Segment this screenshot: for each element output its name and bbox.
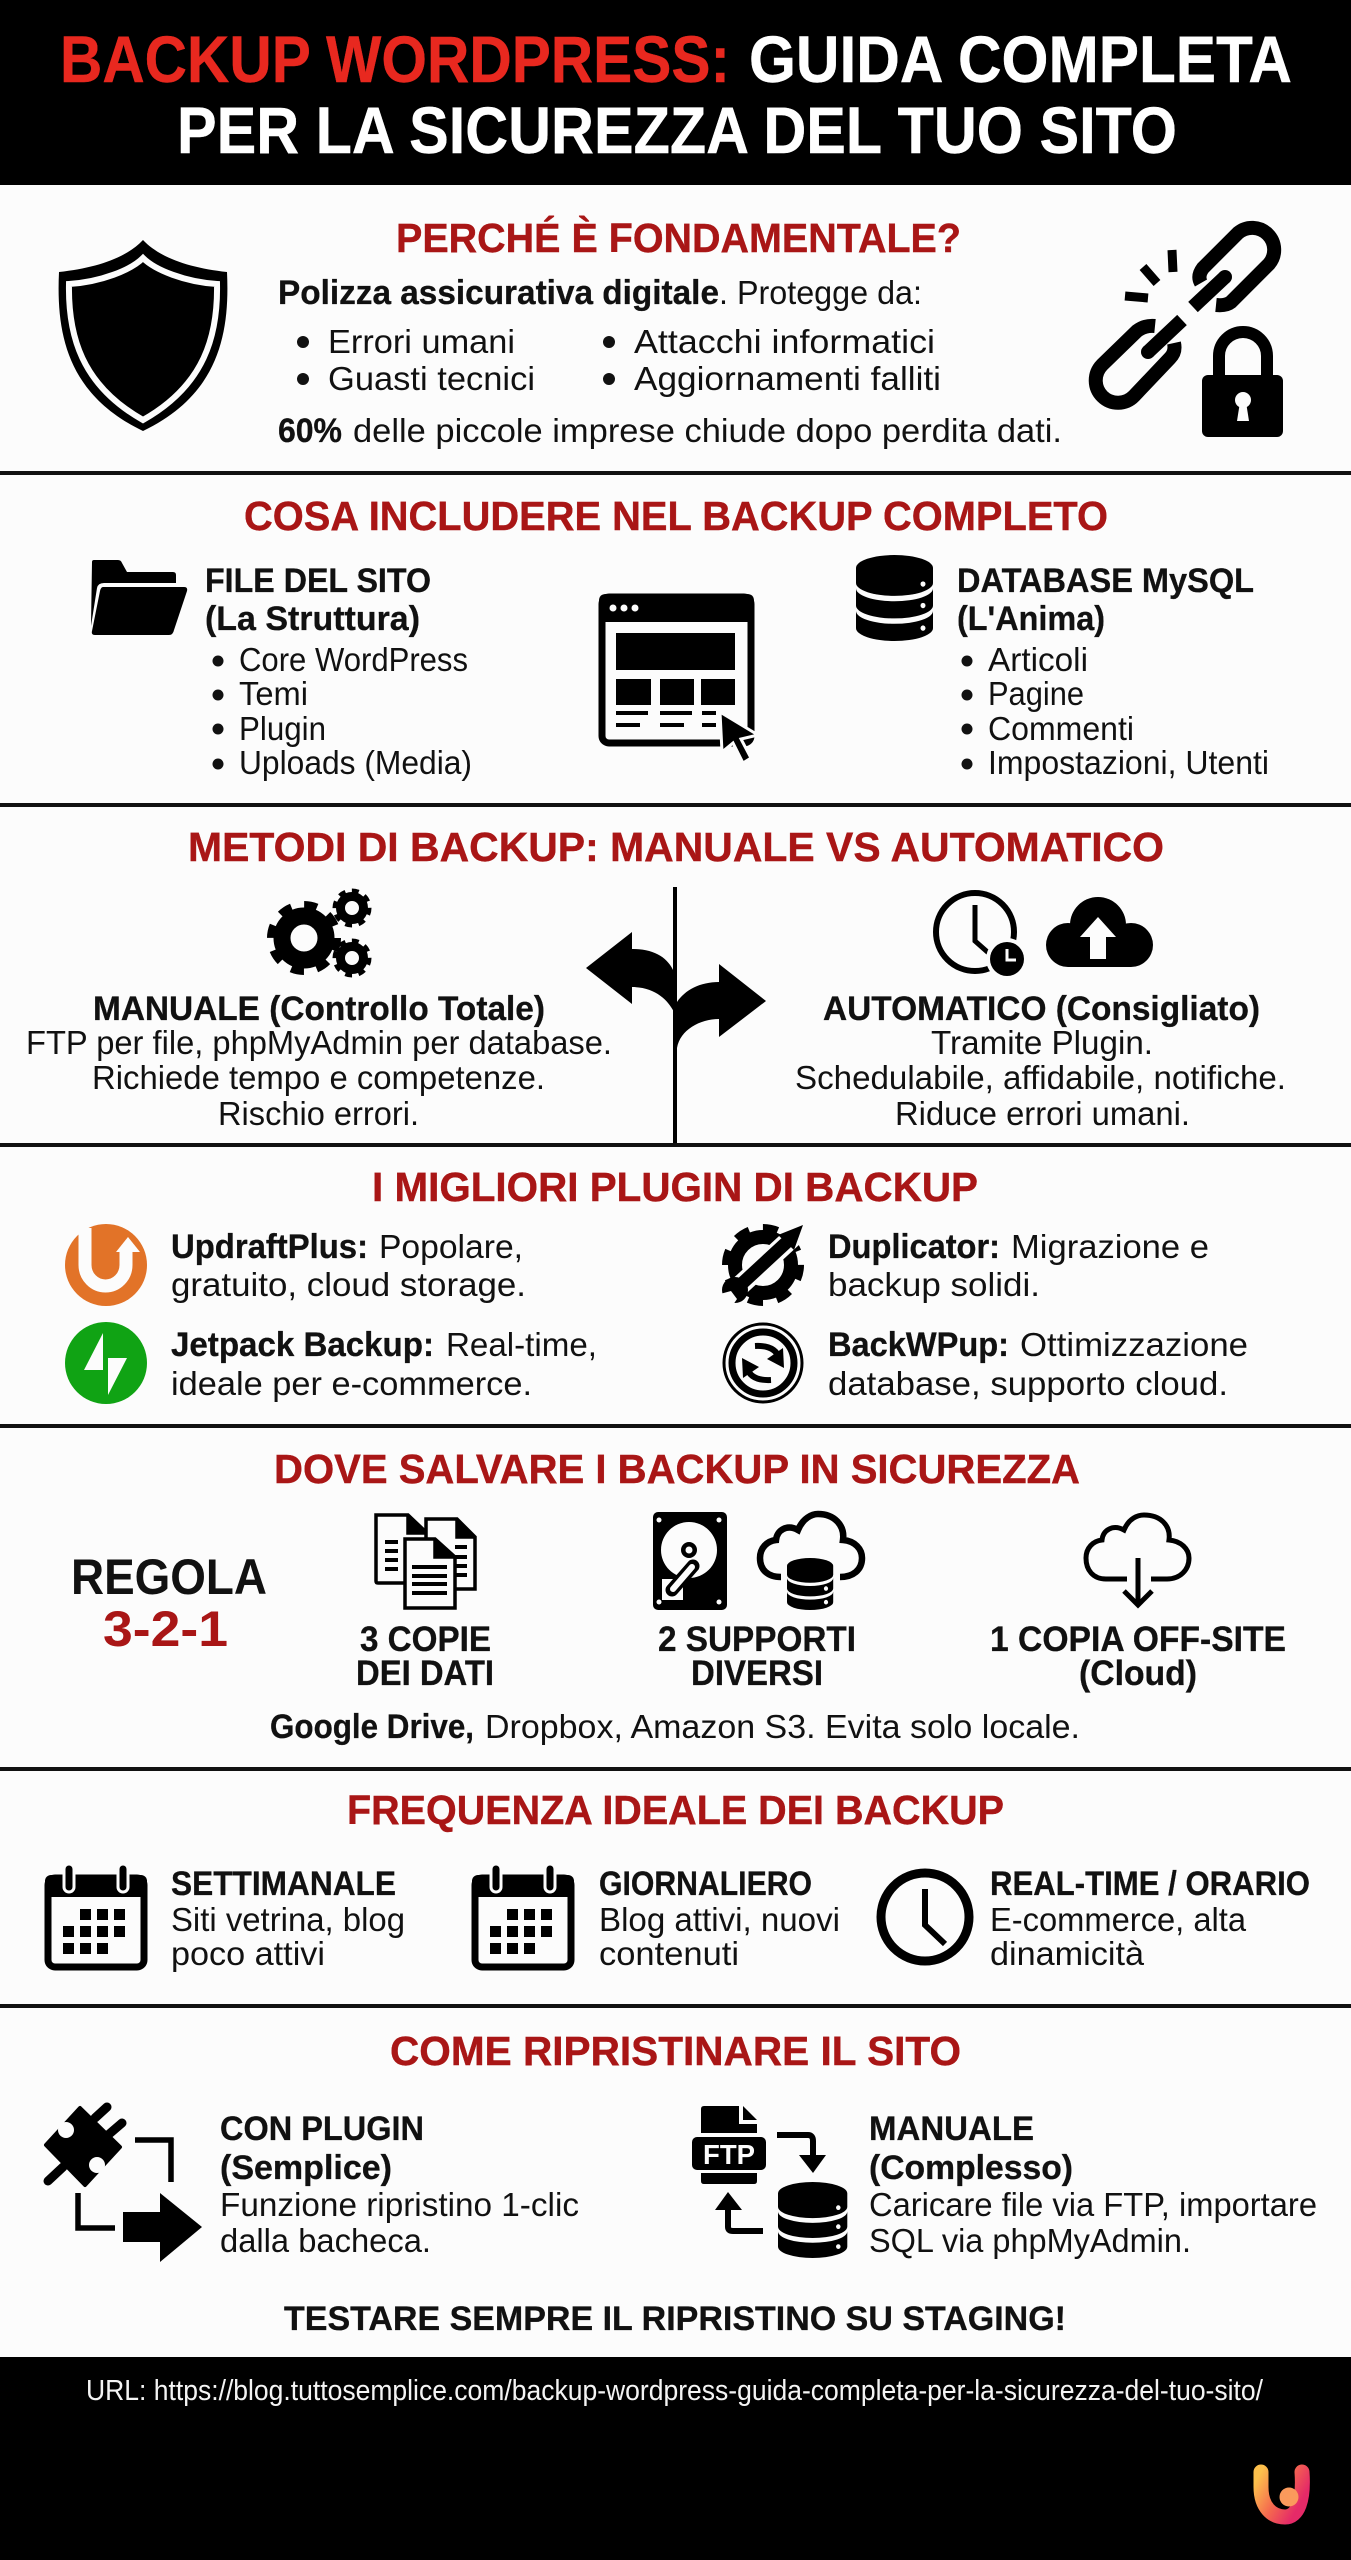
text: con plugin: Funzione ripristino 1-clic xyxy=(220,2186,579,2223)
text: giornaliero: GIORNALIERO xyxy=(599,1865,812,1903)
icon: shield xyxy=(59,240,227,431)
text: manuale ripristino: MANUALE xyxy=(869,2110,1034,2148)
text: file del sito: (La Struttura) xyxy=(205,600,420,638)
text: giornaliero: Blog attivi, nuovi xyxy=(599,1901,840,1938)
heading: FREQUENZA IDEALE DEI BACKUP xyxy=(347,1787,1004,1833)
text: destinazioni: Dropbox, Amazon S3. Evita solo locale. xyxy=(485,1708,1080,1745)
text: automatico xyxy=(795,990,1286,1132)
text: database mysql: Articoli xyxy=(988,641,1088,678)
text: destinazioni: Google Drive, xyxy=(270,1708,474,1746)
icon: folder xyxy=(91,560,187,635)
text: automatico: Riduce errori umani. xyxy=(895,1095,1190,1132)
label: 3 copie: DEI DATI xyxy=(356,1654,494,1693)
text: database mysql: Pagine xyxy=(988,675,1084,712)
callout: testare su staging: TESTARE SEMPRE IL RIPRISTINO SU STAGING! xyxy=(284,2300,1066,2338)
text: manuale: FTP per file, phpMyAdmin per database. xyxy=(26,1024,612,1061)
text: duplicator: backup solidi. xyxy=(828,1266,1040,1303)
text: real-time: dinamicità xyxy=(990,1935,1145,1972)
text: file del sito: Core WordPress xyxy=(239,641,468,678)
label: 3 copie: 3 COPIE xyxy=(360,1620,491,1659)
label: 3 copie xyxy=(356,1620,494,1693)
text: giornaliero xyxy=(599,1865,840,1972)
text: file del sito: Plugin xyxy=(239,710,326,747)
list: rischi: Attacchi informatici xyxy=(634,323,935,360)
panel: perché è fondamentale xyxy=(59,215,1283,450)
text: duplicator: Migrazione e xyxy=(1011,1228,1209,1265)
text: automatico: Schedulabile, affidabile, notifiche. xyxy=(795,1059,1286,1096)
text: backwpup: Ottimizzazione xyxy=(1020,1326,1248,1363)
icon: calendar daily xyxy=(472,1864,574,1967)
heading: COME RIPRISTINARE IL SITO xyxy=(390,2028,961,2074)
text: statistica 60%: 60% xyxy=(278,412,342,450)
text: file del sito: Uploads (Media) xyxy=(239,744,472,781)
text: updraftplus: UpdraftPlus: xyxy=(171,1228,368,1266)
text: polizza xyxy=(278,274,922,312)
label: 1 copia off-site xyxy=(990,1620,1286,1693)
footer xyxy=(0,2357,1351,2560)
panel: come ripristinare xyxy=(46,2028,1317,2338)
heading: METODI DI BACKUP: MANUALE VS AUTOMATICO xyxy=(188,824,1164,870)
text: settimanale: poco attivi xyxy=(171,1935,325,1972)
text: giornaliero: contenuti xyxy=(599,1935,739,1972)
panel: migliori plugin xyxy=(65,1164,1248,1404)
icon: cloud upload xyxy=(1046,897,1153,967)
icon: ftp to database: FTP xyxy=(703,2139,755,2170)
text: manuale: Rischio errori. xyxy=(218,1095,419,1132)
text: polizza: Polizza assicurativa digitale xyxy=(278,274,719,312)
text: destinazioni xyxy=(270,1708,1080,1746)
label: regola 3-2-1: 3-2-1 xyxy=(103,1601,228,1657)
text: settimanale: SETTIMANALE xyxy=(171,1865,396,1903)
text: real-time: E-commerce, alta xyxy=(990,1901,1247,1938)
text: automatico: AUTOMATICO (Consigliato) xyxy=(823,990,1260,1028)
icon: calendar weekly xyxy=(45,1864,147,1967)
icon: jetpack xyxy=(65,1322,147,1404)
icon: database xyxy=(856,555,933,641)
text: con plugin: (Semplice) xyxy=(220,2149,392,2187)
label: 2 supporti: 2 SUPPORTI xyxy=(658,1620,856,1659)
icon: hard disk xyxy=(653,1512,727,1610)
text: manuale xyxy=(26,990,612,1132)
icon: updraftplus xyxy=(65,1224,147,1306)
text: updraftplus: Popolare, xyxy=(379,1228,523,1265)
label: 1 copia off-site: (Cloud) xyxy=(1079,1654,1197,1693)
label: 2 supporti xyxy=(658,1620,856,1693)
text: file del sito: FILE DEL SITO xyxy=(205,562,431,600)
text: polizza: . Protegge da: xyxy=(719,274,922,311)
text: database mysql: (L'Anima) xyxy=(957,600,1105,638)
text: duplicator: Duplicator: xyxy=(828,1228,1000,1266)
text: jetpack: Real-time, xyxy=(446,1326,597,1363)
icon: diverging arrows and divider xyxy=(586,887,766,1145)
text: backwpup: database, supporto cloud. xyxy=(828,1365,1228,1402)
text: settimanale: Siti vetrina, blog xyxy=(171,1901,405,1938)
text: backwpup: BackWPup: xyxy=(828,1326,1009,1364)
text: real-time xyxy=(990,1865,1310,1972)
title: PER LA SICUREZZA DEL TUO SITO xyxy=(177,93,1177,167)
icon: cloud database xyxy=(760,1514,862,1610)
text: duplicator xyxy=(828,1228,1209,1303)
text: jetpack: ideale per e-commerce. xyxy=(171,1365,532,1402)
text: file del sito xyxy=(205,562,472,781)
text: database mysql: DATABASE MySQL xyxy=(957,562,1254,600)
icon: backwpup xyxy=(724,1324,802,1402)
icon: clock xyxy=(881,1873,969,1961)
text: jetpack: Jetpack Backup: xyxy=(171,1326,434,1364)
header banner xyxy=(0,0,1351,185)
text: manuale ripristino xyxy=(869,2110,1317,2259)
icon: gears xyxy=(271,890,370,976)
title: BACKUP WORDPRESS: xyxy=(60,22,730,96)
text: automatico: Tramite Plugin. xyxy=(931,1024,1153,1061)
label: 2 supporti: DIVERSI xyxy=(691,1654,823,1693)
icon: browser window with cursor xyxy=(599,594,758,763)
icon: document copies xyxy=(376,1515,475,1608)
heading: DOVE SALVARE I BACKUP IN SICUREZZA xyxy=(274,1446,1080,1492)
text: jetpack xyxy=(171,1326,597,1402)
text: database mysql: Commenti xyxy=(988,710,1134,747)
heading: PERCHÉ È FONDAMENTALE? xyxy=(396,215,961,261)
text: manuale ripristino: Caricare file via FTP, importare xyxy=(869,2186,1317,2223)
icon: logo xyxy=(1261,2472,1302,2517)
text: manuale ripristino: SQL via phpMyAdmin. xyxy=(869,2222,1191,2259)
list: rischi: Guasti tecnici xyxy=(328,360,535,397)
text: real-time: REAL-TIME / ORARIO xyxy=(990,1865,1310,1903)
icon: ftp to database xyxy=(692,2106,847,2258)
text: con plugin: dalla bacheca. xyxy=(220,2222,431,2259)
title xyxy=(60,22,1292,167)
url: URL: https://blog.tuttosemplice.com/backup-wordpress-guida-completa-per-la-sicurezza-del-tuo-sito/ xyxy=(86,2375,1264,2407)
panel: dove salvare xyxy=(71,1446,1286,1746)
label: 1 copia off-site: 1 COPIA OFF-SITE xyxy=(990,1620,1286,1659)
text: updraftplus xyxy=(171,1228,526,1303)
text: backwpup xyxy=(828,1326,1248,1402)
list: rischi xyxy=(297,323,941,397)
text: settimanale xyxy=(171,1865,405,1972)
title: GUIDA COMPLETA xyxy=(749,22,1292,96)
panel: frequenza xyxy=(45,1787,1310,1972)
panel: cosa includere xyxy=(91,493,1269,781)
label: regola 3-2-1: REGOLA xyxy=(71,1549,267,1605)
text: manuale: Richiede tempo e competenze. xyxy=(92,1059,545,1096)
icon: duplicator xyxy=(720,1225,803,1308)
text: manuale ripristino: (Complesso) xyxy=(869,2149,1073,2187)
text: file del sito: Temi xyxy=(239,675,308,712)
icon: broken chain and lock xyxy=(1096,228,1283,437)
icon: plugin restore xyxy=(46,2107,202,2262)
label: regola 3-2-1 xyxy=(71,1549,267,1657)
text: database mysql: Impostazioni, Utenti xyxy=(988,744,1269,781)
heading: I MIGLIORI PLUGIN DI BACKUP xyxy=(372,1164,978,1210)
list: rischi: Aggiornamenti falliti xyxy=(634,360,941,397)
text: con plugin xyxy=(220,2110,579,2259)
list: rischi: Errori umani xyxy=(328,323,515,360)
icon: clock xyxy=(936,893,1028,980)
icon: cloud download xyxy=(1086,1515,1189,1605)
text: manuale: MANUALE (Controllo Totale) xyxy=(93,990,545,1028)
text: updraftplus: gratuito, cloud storage. xyxy=(171,1266,526,1303)
text: statistica 60%: delle piccole imprese chiude dopo perdita dati. xyxy=(353,412,1062,449)
panel: metodi di backup xyxy=(26,824,1286,1145)
text: con plugin: CON PLUGIN xyxy=(220,2110,424,2148)
text: database mysql xyxy=(957,562,1269,781)
heading: COSA INCLUDERE NEL BACKUP COMPLETO xyxy=(244,493,1108,539)
